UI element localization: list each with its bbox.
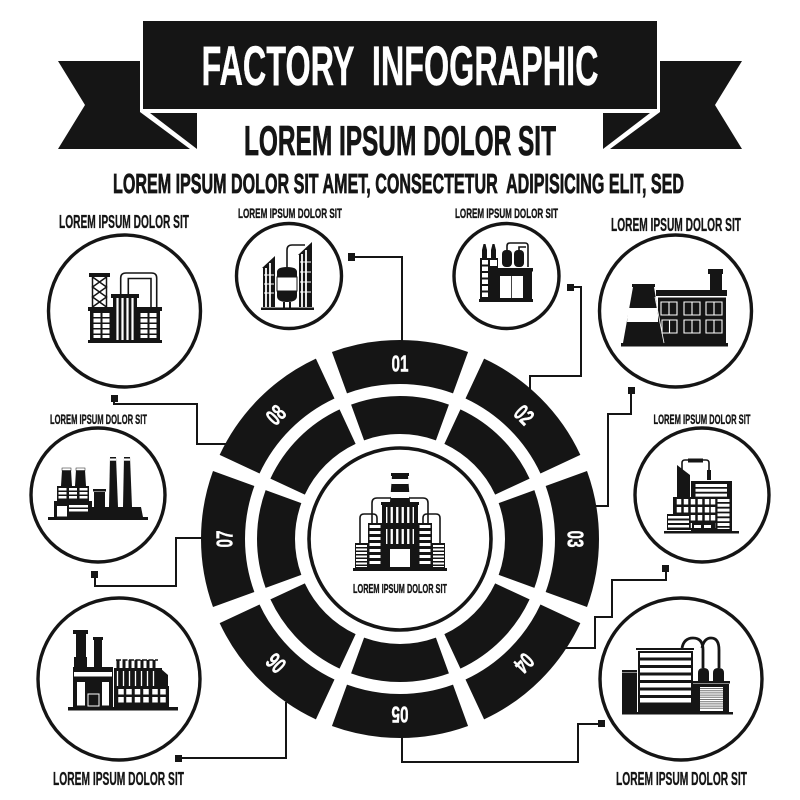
center label: LOREM IPSUM DOLOR SIT	[353, 581, 447, 596]
connector 08	[111, 395, 226, 444]
middle ring segments	[257, 396, 543, 682]
item 2 circle	[236, 224, 342, 328]
outer ring segment 03	[546, 471, 599, 607]
outer ring segment 02: 02	[509, 400, 539, 430]
outer ring segment 01: 01	[392, 350, 409, 376]
item 1 circle	[48, 235, 200, 387]
item 1 label: LOREM IPSUM DOLOR SIT	[59, 212, 189, 232]
ribbon left tail	[58, 61, 190, 149]
connector lines	[91, 253, 669, 762]
item 3 icon	[479, 243, 533, 302]
ribbon right tail	[610, 61, 742, 149]
item 7 circle	[38, 598, 200, 760]
item 4: cooling tower factory	[600, 215, 752, 387]
ribbon left fold	[150, 113, 197, 149]
item 2 label: LOREM IPSUM DOLOR SIT	[238, 205, 342, 221]
item 3 circle	[454, 224, 559, 328]
central wheel	[201, 340, 599, 738]
outer ring segment 06	[211, 594, 345, 728]
item 2: refinery	[236, 205, 342, 328]
item 5: right middle factory	[635, 412, 769, 562]
center circle	[309, 448, 491, 630]
subtitle: LOREM IPSUM DOLOR SIT	[244, 117, 556, 164]
item 8 label: LOREM IPSUM DOLOR SIT	[50, 412, 147, 427]
outer ring segment 06: 06	[261, 648, 291, 678]
outer ring segment 08: 08	[261, 400, 291, 430]
item 6 circle	[600, 598, 762, 760]
outer ring segment 07: 07	[212, 530, 238, 548]
connector 06	[175, 702, 286, 762]
connector 01	[348, 253, 402, 342]
item 4 circle	[600, 235, 752, 387]
item 8: left middle factory	[31, 412, 165, 562]
item 2 icon	[261, 242, 314, 310]
item 8 icon	[48, 457, 148, 520]
item 8 circle	[31, 428, 165, 562]
item 3: plant with tanks	[454, 205, 559, 328]
connector 04	[562, 565, 669, 648]
item 6: lower right factory	[600, 598, 762, 789]
outer ring segment 03: 03	[562, 530, 588, 548]
outer ring segment 08	[211, 350, 345, 484]
item 4 icon	[621, 269, 728, 346]
connector 07	[91, 538, 212, 586]
item 3 label: LOREM IPSUM DOLOR SIT	[455, 205, 558, 221]
ribbon main band	[143, 21, 657, 109]
connector 03	[596, 387, 635, 506]
outer ring segment 02	[455, 350, 589, 484]
outer ring segment 01	[332, 340, 468, 393]
outer ring segment 07	[201, 471, 254, 607]
outer ring segment 04	[455, 594, 589, 728]
item 5 icon	[664, 458, 739, 534]
title banner	[58, 21, 742, 149]
outer ring segment 05: 05	[391, 702, 408, 728]
connector 05	[402, 720, 605, 762]
item 6 icon	[622, 638, 733, 714]
item 5 circle	[635, 428, 769, 562]
outer ring segment 04: 04	[509, 648, 539, 678]
ribbon right fold	[603, 113, 650, 149]
item 7: lower left factory	[38, 598, 200, 789]
item 1 icon	[88, 273, 162, 343]
item 7 label: LOREM IPSUM DOLOR SIT	[53, 769, 184, 789]
outer ring segment 05	[332, 685, 468, 738]
item 7 icon	[68, 630, 178, 710]
center factory icon	[353, 473, 447, 571]
connector 02	[530, 284, 581, 392]
item 1: top left factory	[48, 212, 200, 387]
